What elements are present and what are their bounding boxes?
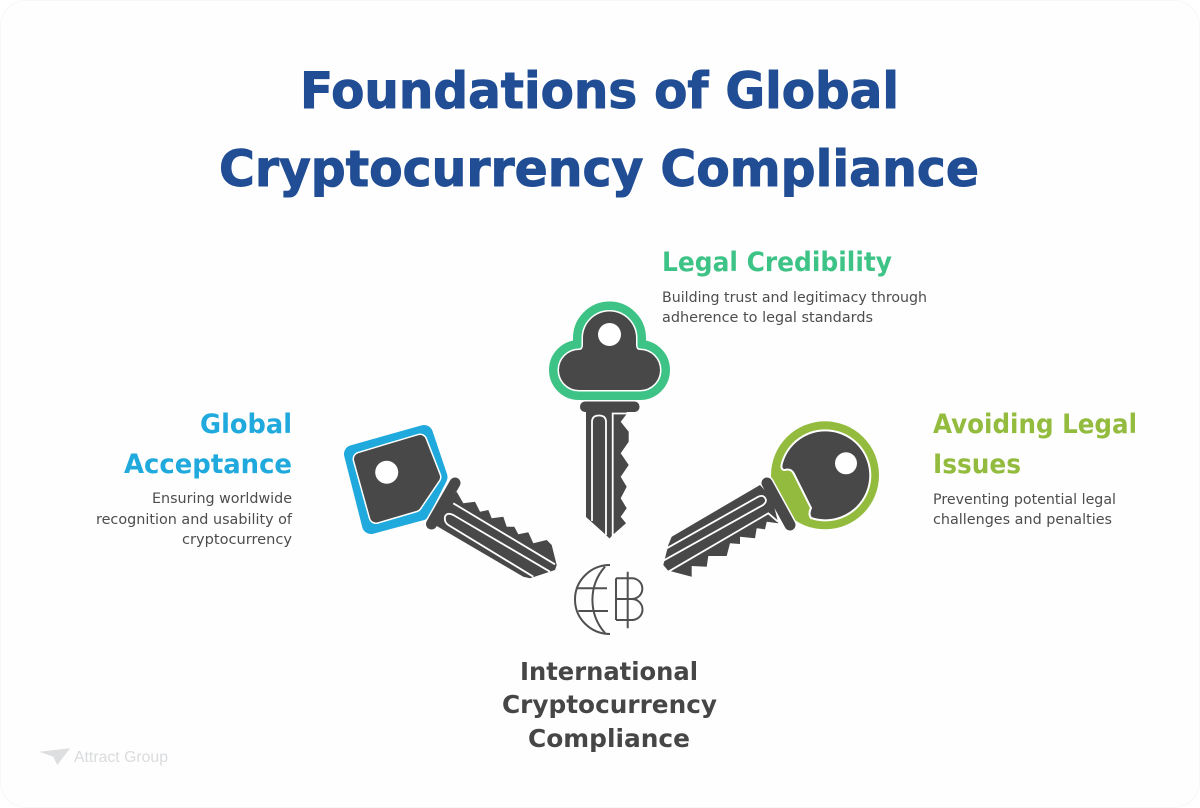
logo: attract group: Attract Group <box>74 749 168 766</box>
heading: international cryptocurrency compliance: Cryptocurrency <box>502 690 717 719</box>
title <box>219 62 979 198</box>
heading: global acceptance: Acceptance <box>124 449 292 480</box>
title: Cryptocurrency Compliance <box>219 140 979 198</box>
panel: avoiding legal issues text <box>933 409 1137 528</box>
heading: global acceptance <box>124 409 292 480</box>
text: avoiding legal issues description <box>933 492 1116 528</box>
icon: green key <box>559 312 660 538</box>
heading: international cryptocurrency compliance: Compliance <box>528 724 690 753</box>
heading: international cryptocurrency compliance: International <box>520 657 698 686</box>
panel: global acceptance text <box>96 409 293 548</box>
text: global acceptance description <box>96 491 293 548</box>
text: avoiding legal issues description: challenges and penalties <box>933 512 1112 528</box>
heading: global acceptance: Global <box>200 409 292 440</box>
title: Foundations of Global <box>300 62 899 120</box>
text: legal credibility description <box>662 290 927 326</box>
text: legal credibility description: adherence to legal standards <box>662 310 873 326</box>
icon: lime key <box>663 421 879 577</box>
heading: avoiding legal issues: Avoiding Legal <box>933 409 1137 440</box>
text: global acceptance description: Ensuring worldwide <box>152 491 292 507</box>
heading: avoiding legal issues: Issues <box>933 449 1021 480</box>
logo: attract group <box>39 748 168 766</box>
icon: globe and bitcoin symbol <box>575 565 642 634</box>
heading: international cryptocurrency compliance <box>502 657 717 753</box>
text: global acceptance description: recognition and usability of <box>96 512 293 528</box>
heading: legal credibility: Legal Credibility <box>662 247 892 278</box>
text: legal credibility description: Building trust and legitimacy through <box>662 290 927 306</box>
heading: avoiding legal issues <box>933 409 1137 480</box>
icon: blue key <box>353 434 557 578</box>
panel: legal credibility text <box>662 247 927 326</box>
text: avoiding legal issues description: Preventing potential legal <box>933 492 1116 508</box>
text: global acceptance description: cryptocurrency <box>182 532 292 548</box>
